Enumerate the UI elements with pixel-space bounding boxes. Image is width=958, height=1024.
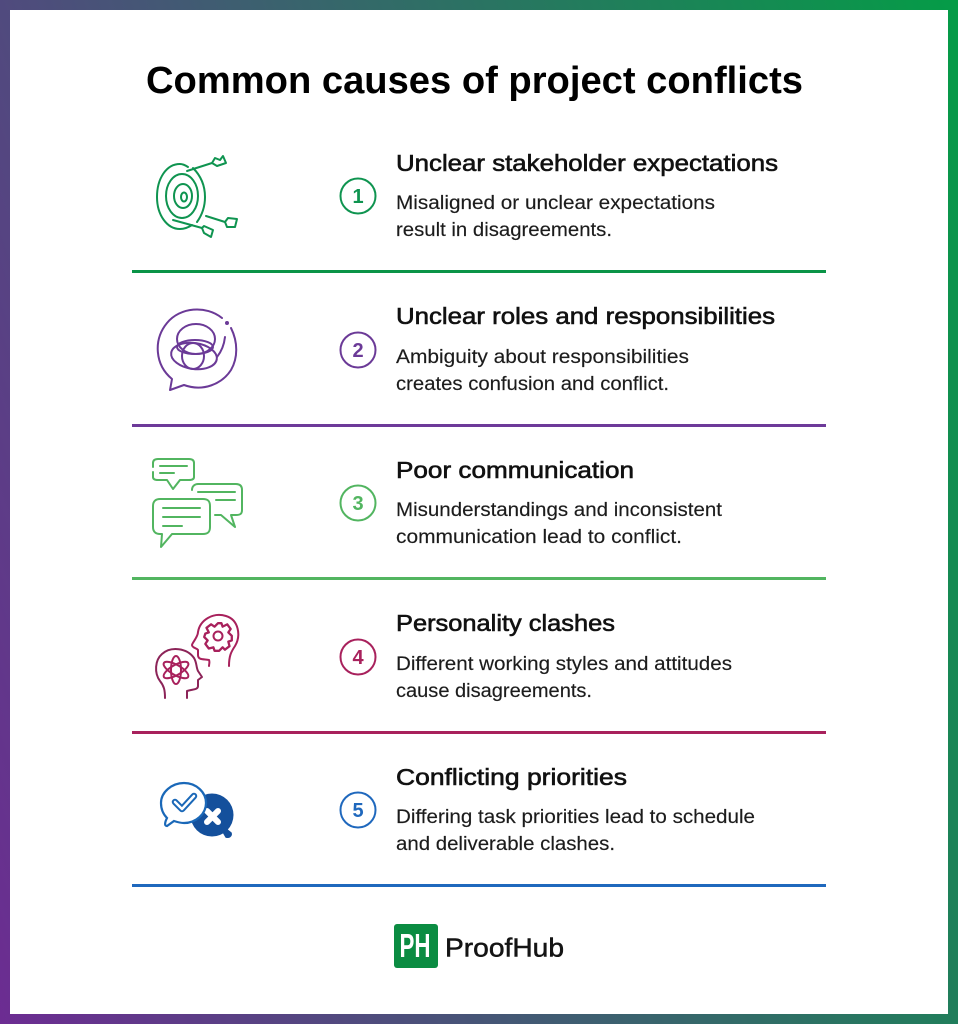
divider 1 — [132, 270, 826, 273]
row 1: unclear stakeholder expectations — [157, 150, 778, 241]
divider 2 — [132, 424, 826, 427]
description 1: Misaligned or unclear expectations — [396, 193, 715, 214]
description 5: and deliverable clashes. — [396, 834, 615, 855]
number badge 2: 2 — [352, 340, 364, 362]
description 5: Differing task priorities lead to schedule — [396, 807, 755, 828]
divider 3 — [132, 577, 826, 580]
number badge 4: 4 — [352, 647, 364, 669]
description 4: Different working styles and attitudes — [396, 654, 732, 675]
divider 5 — [132, 884, 826, 887]
number badge 1 — [340, 178, 376, 214]
icon: two heads with gear and atom — [156, 615, 238, 698]
description 2: Ambiguity about responsibilities — [396, 347, 689, 368]
logo wordmark: ProofHub — [445, 932, 564, 962]
icon: tangled speech bubble — [158, 309, 236, 390]
description 3: communication lead to conflict. — [396, 527, 682, 548]
number badge 2 — [340, 332, 376, 368]
number badge 4 — [340, 640, 376, 674]
row 3: poor communication — [153, 457, 723, 548]
number badge 3: 3 — [352, 493, 364, 515]
heading 2: Unclear roles and responsibilities — [396, 303, 775, 329]
description 1: result in disagreements. — [396, 220, 612, 241]
title: Common causes of project conflicts — [146, 60, 803, 102]
number badge 5: 5 — [352, 800, 364, 822]
number badge 1: 1 — [352, 186, 364, 208]
heading 1: Unclear stakeholder expectations — [396, 150, 778, 176]
logo: ProofHub — [394, 924, 564, 968]
row 2: unclear roles and responsibilities — [158, 303, 775, 395]
logo mark — [394, 924, 438, 968]
number badge 5 — [340, 792, 376, 828]
heading 5: Conflicting priorities — [396, 764, 627, 790]
row 5: conflicting priorities — [161, 764, 755, 855]
logo mark: PH — [400, 927, 430, 964]
row 4: personality clashes — [156, 610, 732, 702]
icon: check and cross speech bubbles — [161, 783, 234, 837]
description 4: cause disagreements. — [396, 681, 592, 702]
heading 3: Poor communication — [396, 457, 634, 483]
description 3: Misunderstandings and inconsistent — [396, 500, 723, 521]
icon: chat bubbles — [153, 459, 242, 547]
heading 4: Personality clashes — [396, 610, 615, 636]
number badge 3 — [340, 486, 376, 520]
divider 4 — [132, 731, 826, 734]
description 2: creates confusion and conflict. — [396, 374, 669, 395]
icon: target with arrows — [157, 156, 237, 237]
